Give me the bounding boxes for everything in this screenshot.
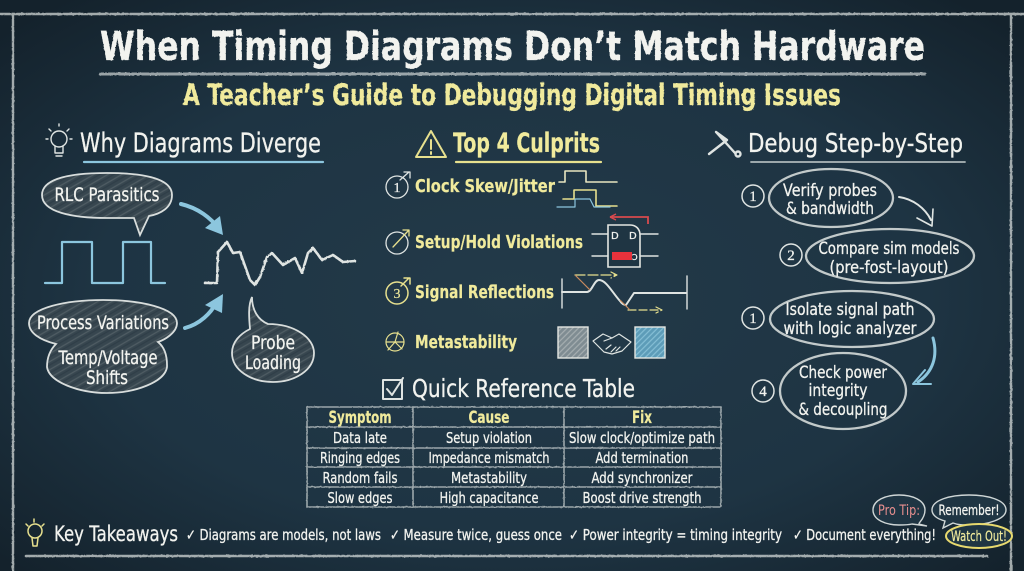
table row: ringing edges: Ringing edges — [320, 449, 400, 467]
bubble: RLC parasitics: RLC Parasitics — [54, 184, 160, 206]
table row: random fails — [322, 469, 693, 487]
table header row — [328, 408, 652, 428]
bubble: process variations and temp voltage shifts — [29, 300, 177, 393]
table row: ringing edges — [320, 449, 688, 467]
table row: slow edges: High capacitance — [440, 489, 538, 507]
table header row: Fix — [632, 408, 652, 428]
icon: warning triangle — [416, 131, 446, 157]
heading: Why Diagrams Diverge — [80, 128, 321, 159]
table row: ringing edges: Impedance mismatch — [428, 449, 550, 467]
callout: remember — [932, 495, 1006, 528]
table row: slow edges: Boost drive strength — [582, 489, 702, 507]
callout: watch out — [946, 524, 1012, 548]
title underline — [100, 72, 925, 76]
culprit 2: setup and hold violations — [386, 214, 658, 267]
panel: debug step-by-step — [709, 129, 974, 429]
panel: key takeaways — [26, 495, 1012, 548]
table row: ringing edges: Add termination — [596, 449, 688, 467]
panel: why diagrams diverge — [29, 124, 355, 393]
bubble: probe loading: Probe — [251, 332, 295, 354]
arrow: variations to waveform — [185, 294, 223, 328]
flip-flop diagram: D — [629, 231, 637, 242]
step 3: with logic analyzer — [784, 319, 917, 339]
heading: Top 4 Culprits — [453, 128, 600, 159]
icon: yellow bulb — [26, 519, 44, 546]
heading underline — [751, 161, 965, 163]
heading: Debug Step-by-Step — [748, 129, 963, 159]
table row: data late — [333, 429, 715, 447]
bubble: RLC parasitics — [42, 173, 172, 235]
takeaway 4: ✓ Document everything! — [793, 526, 936, 544]
step 1: & bandwidth — [786, 199, 874, 219]
panel: quick reference table — [307, 374, 721, 507]
table header row: Cause — [468, 408, 510, 428]
table row: data late: Slow clock/optimize path — [569, 429, 715, 447]
table row: slow edges — [328, 489, 702, 507]
bubble: process variations and temp voltage shifts: Shifts — [86, 367, 128, 389]
distorted waveform — [205, 242, 355, 285]
culprit 2: setup and hold violations: Setup/Hold Violations — [415, 232, 583, 253]
culprit 3: signal reflections: 3 — [394, 287, 400, 302]
icon: probes — [709, 132, 740, 156]
callout: pro tip — [873, 495, 927, 526]
step 4: & decoupling — [798, 400, 888, 420]
culprit 3: signal reflections: Signal Reflections — [415, 282, 554, 303]
callout: remember: Remember! — [938, 503, 1000, 519]
table header row: Symptom — [328, 408, 392, 428]
culprit 1: clock skew and jitter: Clock Skew/Jitter — [415, 176, 555, 197]
table row: random fails: Add synchronizer — [592, 469, 693, 487]
step 3 — [742, 291, 934, 347]
arrow: parasitics to waveform — [181, 204, 223, 235]
step 2: (pre-fost-layout) — [830, 258, 948, 278]
takeaway 1: ✓ Diagrams are models, not laws — [186, 526, 381, 544]
step 2: Compare sim models — [818, 239, 960, 259]
step 4: 4 — [759, 384, 767, 400]
table row: slow edges: Slow edges — [328, 489, 393, 507]
step 4 — [752, 353, 906, 429]
step 1 — [742, 169, 893, 227]
bubble: process variations and temp voltage shifts: Process Variations — [37, 312, 169, 334]
heading underline — [456, 161, 601, 163]
table grid — [307, 407, 721, 507]
reflection waveform — [562, 272, 687, 313]
culprit 4: metastability: Metastability — [415, 332, 517, 353]
step 1: Verify probes — [783, 181, 877, 201]
bubble: probe loading — [232, 297, 314, 382]
step 4: Check power — [799, 363, 887, 383]
title block — [100, 24, 925, 112]
table row: random fails: Metastability — [451, 469, 527, 487]
ideal square wave — [45, 242, 165, 283]
step 1: 1 — [749, 189, 757, 205]
icon: checkbox — [383, 378, 403, 399]
arrow: step 1 to 2 — [899, 197, 933, 226]
culprit 1: clock skew and jitter: 1 — [394, 181, 400, 196]
takeaway 2: ✓ Measure twice, guess once — [390, 526, 562, 544]
panel: top 4 culprits — [386, 128, 687, 358]
step 2 — [780, 229, 974, 283]
heading: Quick Reference Table — [412, 374, 635, 403]
metastability squares and handshake — [558, 327, 665, 358]
heading: Key Takeaways — [54, 522, 178, 546]
table row: random fails: Random fails — [322, 469, 398, 487]
culprit 4: metastability — [386, 327, 665, 358]
bubble: process variations and temp voltage shifts: Temp/Voltage — [58, 347, 158, 369]
flip-flop diagram: Ↄ — [632, 253, 638, 262]
flip-flop diagram: D — [611, 231, 619, 242]
bubble: probe loading: Loading — [245, 352, 301, 374]
icon: light bulb — [46, 124, 72, 156]
heading underline — [84, 161, 323, 163]
arrow: step 3 to 4 — [913, 338, 935, 384]
step 4: integrity — [808, 381, 868, 401]
flip-flop diagram — [592, 214, 658, 267]
step 2: 2 — [787, 248, 795, 264]
culprit 3: signal reflections — [386, 272, 687, 313]
table row: data late: Data late — [333, 429, 387, 447]
step 3: Isolate signal path — [786, 300, 914, 320]
step 3: 1 — [749, 311, 757, 327]
table row: data late: Setup violation — [446, 429, 532, 447]
culprit 1: clock skew and jitter — [386, 171, 617, 207]
callout: pro tip: Pro Tip: — [878, 503, 920, 519]
takeaway 3: ✓ Power integrity = timing integrity — [569, 526, 782, 544]
